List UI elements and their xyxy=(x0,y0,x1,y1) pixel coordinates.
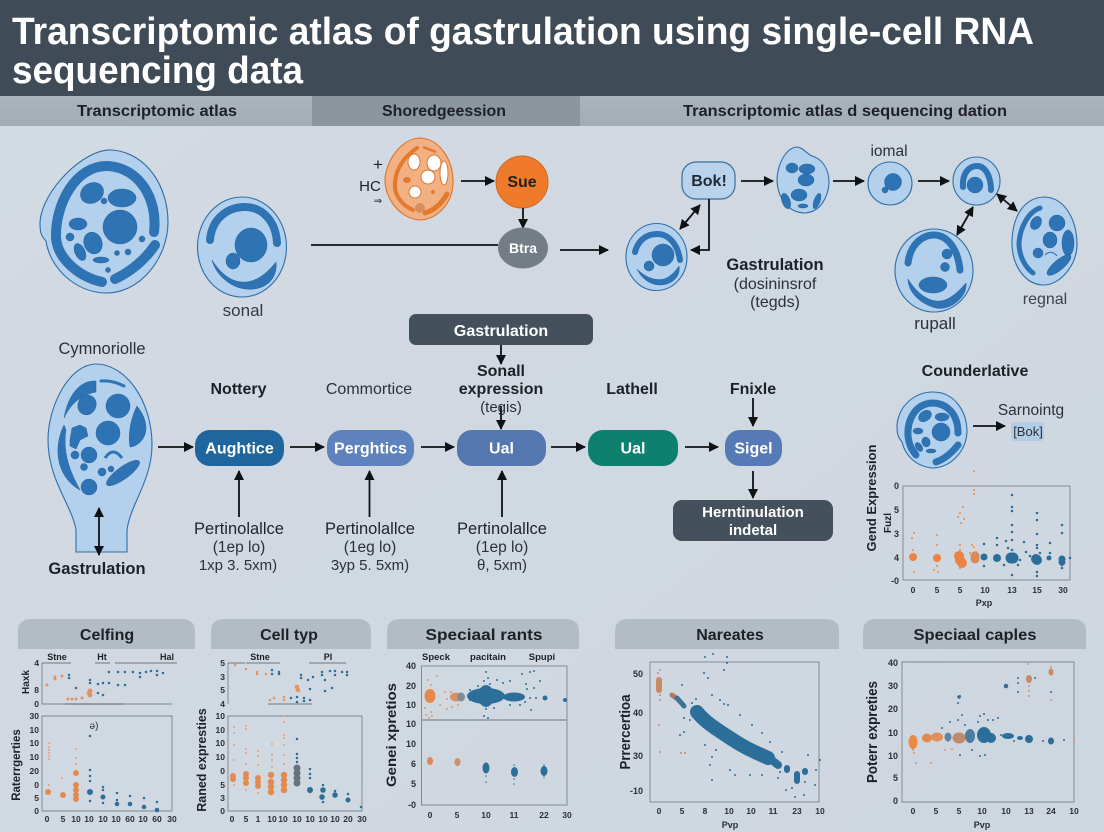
x axis labels: 5 xyxy=(958,585,963,595)
title banner: sequencing data xyxy=(12,50,304,92)
top chart: 5 xyxy=(220,685,225,695)
top chart: Hal xyxy=(160,652,174,662)
heading: Sonall expression: (tegis) xyxy=(480,399,522,416)
top chart xyxy=(220,652,347,709)
heading: Lathell: Lathell xyxy=(606,381,658,398)
arrow: Bok to cell B xyxy=(741,180,773,182)
heading: Counderlative: Counderlative xyxy=(922,363,1028,380)
bottom chart: 30 xyxy=(30,711,39,721)
heading xyxy=(615,619,839,649)
arrow: Perghtics to Ual xyxy=(421,446,454,448)
heading: Cell typ xyxy=(260,627,318,644)
text: Gastrulation caption xyxy=(726,256,824,311)
bottom chart: 10 xyxy=(216,752,225,762)
chart: 0 xyxy=(428,810,433,820)
bottom chart: 10 xyxy=(278,814,288,824)
arrow: Aughtice to Perghtics xyxy=(290,446,324,448)
y axis labels: 3 xyxy=(894,529,899,539)
arrow: Ual to Ual xyxy=(551,446,585,448)
text: Gastrulation caption: (dosininsrof xyxy=(734,276,817,293)
y axis labels: -0 xyxy=(891,576,899,586)
icon: Counderlative cell xyxy=(897,392,967,468)
chart: 0 xyxy=(911,806,916,816)
bottom chart: 5 xyxy=(34,793,39,803)
chart: 10 xyxy=(1001,806,1011,816)
chart: 10 xyxy=(1069,806,1079,816)
chart: -10 xyxy=(630,786,643,796)
top chart: Haxk xyxy=(21,670,32,694)
arrow: up to Perghtics xyxy=(368,471,370,517)
label: Cymnoriolle: Cymnoriolle xyxy=(58,340,146,358)
top chart: 5 xyxy=(220,658,225,668)
y axis labels: 5 xyxy=(894,505,899,515)
bottom chart: Raned expresties xyxy=(195,708,209,812)
arrow: cell D double to regnal xyxy=(997,194,1017,211)
icon: regnal cell xyxy=(1012,197,1077,285)
box: Herntinulation indetal: Herntinulation xyxy=(702,504,804,521)
box: Herntinulation indetal: indetal xyxy=(729,522,777,539)
y axis labels: 0 xyxy=(894,481,899,491)
chart: 5 xyxy=(893,773,898,783)
node: Ual green: Ual xyxy=(621,440,645,458)
node: Aughtice xyxy=(195,430,284,466)
arrow: Ual to Sigel xyxy=(685,446,718,448)
label: sonal: sonal xyxy=(223,301,263,320)
arrow: Bok double to cell A xyxy=(680,205,700,229)
node: Bok xyxy=(682,162,735,199)
chart: 5 xyxy=(680,806,685,816)
bottom chart: 0 xyxy=(34,806,39,816)
node: Ual blue xyxy=(457,430,546,466)
text: Pertinolallce 1: (1ep lo) xyxy=(213,539,265,556)
panel: Speciaal rants xyxy=(383,619,579,820)
chart: 50 xyxy=(633,669,643,679)
text: Pertinolallce 3: θ, 5xm) xyxy=(477,557,527,574)
chart: 30 xyxy=(633,751,643,761)
chart: 6 xyxy=(411,759,416,769)
node: Sue: Sue xyxy=(507,174,537,191)
icon: flask cell xyxy=(48,364,152,552)
bottom chart: 10 xyxy=(216,738,225,748)
bottom chart: 0 xyxy=(34,780,39,790)
chart: Poterr expreties xyxy=(864,681,881,783)
heading: Celfing xyxy=(80,627,134,644)
bottom chart: 10 xyxy=(30,752,39,762)
title banner xyxy=(0,0,1104,96)
section tab bar: Shoredgeession xyxy=(382,103,506,120)
top chart: Ht xyxy=(97,652,107,662)
panel: Speciaal rants: Spupi xyxy=(529,652,555,663)
heading: Nottery: Nottery xyxy=(210,381,267,398)
arrow: Sue to Btra xyxy=(522,208,524,228)
bottom chart: 0 xyxy=(220,766,225,776)
panel: Speciaal rants: pacitain xyxy=(470,652,506,663)
bottom chart: 5 xyxy=(220,780,225,790)
panel: Nareates xyxy=(615,619,839,830)
y axis labels xyxy=(891,481,899,586)
chart: 5 xyxy=(957,806,962,816)
heading: Nareates xyxy=(696,627,764,644)
section tab bar xyxy=(0,96,1104,126)
bottom chart: 5 xyxy=(244,814,249,824)
bottom chart: 1 xyxy=(256,814,261,824)
arrow: Sonall to Ual xyxy=(500,406,502,429)
bottom chart: 10 xyxy=(292,814,302,824)
x axis labels: 10 xyxy=(980,585,990,595)
chart: 23 xyxy=(792,806,802,816)
bottom chart: 10 xyxy=(305,814,315,824)
orange points xyxy=(912,471,976,572)
top chart: Stne xyxy=(250,652,270,662)
heading: Speciaal caples xyxy=(914,627,1037,644)
bottom chart: 10 xyxy=(330,814,340,824)
icon: cell D xyxy=(953,157,1000,205)
bottom chart: Raterrgerties xyxy=(11,729,23,801)
bottom chart xyxy=(195,708,367,824)
chart: 10 xyxy=(746,806,756,816)
callout: Sarnointg Bok: [Bok] xyxy=(1013,424,1043,439)
top chart: 4 xyxy=(34,658,39,668)
bottom chart: 20 xyxy=(30,766,39,776)
arrow: up to Aughtice xyxy=(238,471,240,517)
arrow: Fnixle to Sigel xyxy=(752,398,754,426)
chart: 10 xyxy=(406,700,416,710)
chart: -0 xyxy=(408,800,416,810)
heading: Commortice: Commortice xyxy=(326,381,412,398)
bottom chart: 3 xyxy=(220,793,225,803)
text: Pertinolallce 2: 3yp 5. 5xm) xyxy=(331,557,409,574)
top chart: 4 xyxy=(220,699,225,709)
label: HC: HC xyxy=(359,178,381,195)
icon: large cell xyxy=(40,150,168,293)
arrow: Sigel to Herntinulation xyxy=(752,471,754,498)
label: iomal: iomal xyxy=(870,143,908,160)
callout: Sarnointg Bok: Sarnointg xyxy=(998,402,1064,419)
label: Gastrulation under flask: Gastrulation xyxy=(48,560,146,578)
chart: 10 xyxy=(406,719,416,729)
bottom chart: 10 xyxy=(98,814,108,824)
text: Pertinolallce 1 xyxy=(194,520,284,574)
chart: 0 xyxy=(893,796,898,806)
chart: gene expression strip plot: Pxp xyxy=(976,598,993,608)
panel: Speciaal caples xyxy=(863,619,1086,830)
chart: 20 xyxy=(406,681,416,691)
chart xyxy=(864,658,1079,830)
heading: Sonall expression xyxy=(459,363,543,416)
bottom chart: 60 xyxy=(152,814,162,824)
bottom chart: 10 xyxy=(267,814,277,824)
bottom chart: 30 xyxy=(167,814,177,824)
node: Btra: Btra xyxy=(509,240,537,256)
title banner: Transcriptomic atlas of gastrulation using single-cell RNA xyxy=(12,11,1034,53)
text: Pertinolallce 2: (1eg lo) xyxy=(344,539,396,556)
arrow: Btra to cell xyxy=(560,249,608,251)
y axis labels: 4 xyxy=(894,553,899,563)
chart: 22 xyxy=(539,810,549,820)
icon: orange cell xyxy=(385,138,453,220)
box: Gastrulation xyxy=(409,314,593,345)
arrow: line into Btra xyxy=(311,244,498,246)
node: Sigel xyxy=(725,430,782,466)
x axis labels xyxy=(911,585,1068,595)
heading: Speciaal rants xyxy=(426,627,543,644)
bottom chart: 10 xyxy=(138,814,148,824)
text: Pertinolallce 3 xyxy=(457,520,547,574)
chart xyxy=(617,654,825,830)
top chart: PI xyxy=(324,652,332,662)
node: Perghtics xyxy=(327,430,414,466)
chart: Pvp xyxy=(722,820,739,830)
bottom chart: 60 xyxy=(125,814,135,824)
chart: 20 xyxy=(888,704,898,714)
chart: 5 xyxy=(411,779,416,789)
chart: 30 xyxy=(888,681,898,691)
heading: Sonall expression: Sonall xyxy=(477,363,525,380)
chart: 40 xyxy=(888,658,898,668)
text: Pertinolallce 1: 1xp 3. 5xm) xyxy=(199,557,277,574)
label: HC xyxy=(359,155,383,207)
arrow: vertical double in flask neck xyxy=(98,508,100,555)
bottom chart: 10 xyxy=(216,711,225,721)
text: Pertinolallce 3: (1ep lo) xyxy=(476,539,528,556)
chart: 0 xyxy=(657,806,662,816)
chart xyxy=(383,661,572,820)
panel: Cell typ xyxy=(195,619,371,824)
bottom chart: 0 xyxy=(230,814,235,824)
icon: cell A xyxy=(626,224,687,290)
top chart: 0 xyxy=(34,699,39,709)
text: Pertinolallce 2 xyxy=(325,520,415,574)
axis titles: Gend Expression xyxy=(864,444,879,551)
bottom chart: 10 xyxy=(216,725,225,735)
node: Sue xyxy=(496,156,548,208)
text: Pertinolallce 3: Pertinolallce xyxy=(457,520,547,538)
chart: 30 xyxy=(562,810,572,820)
x axis labels: 0 xyxy=(911,585,916,595)
label: rupall: rupall xyxy=(914,314,956,333)
box: Herntinulation indetal xyxy=(673,500,833,541)
icon: cell C xyxy=(868,162,912,205)
arrow: cell B to cell C xyxy=(833,180,864,182)
panel: Speciaal rants: Speck xyxy=(422,652,451,663)
bottom chart: 30 xyxy=(357,814,367,824)
node: Perghtics: Perghtics xyxy=(334,440,407,458)
bottom chart: 0 xyxy=(220,806,225,816)
chart: 10 xyxy=(481,810,491,820)
bottom chart: 10 xyxy=(84,814,94,824)
chart: 10 xyxy=(724,806,734,816)
blue points xyxy=(984,495,1070,576)
arrow: cell C to cell D xyxy=(918,180,949,182)
chart: 10 xyxy=(406,739,416,749)
node: Btra xyxy=(498,228,548,268)
heading: Sonall expression: expression xyxy=(459,381,543,398)
arrow: cell D double to rupall xyxy=(957,207,973,235)
chart: 10 xyxy=(888,728,898,738)
node: Bok: Bok! xyxy=(691,173,727,190)
bottom chart: 20 xyxy=(343,814,353,824)
heading xyxy=(211,619,371,649)
top chart: 3 xyxy=(220,672,225,682)
top chart: Stne xyxy=(47,652,67,662)
bottom chart: 10 xyxy=(30,725,39,735)
bottom chart: 10 xyxy=(30,738,39,748)
heading xyxy=(863,619,1086,649)
box: Gastrulation: Gastrulation xyxy=(454,323,548,340)
chart: 5 xyxy=(455,810,460,820)
node: Sigel: Sigel xyxy=(734,440,773,458)
top chart: 8 xyxy=(34,685,39,695)
bottom chart: 10 xyxy=(318,814,328,824)
chart: 11 xyxy=(768,806,778,816)
chart: gene expression strip plot: Fuzl xyxy=(883,513,894,533)
x axis labels: 15 xyxy=(1032,585,1042,595)
arrow: orange cell to Sue xyxy=(461,180,494,182)
chart: Pvp xyxy=(974,820,991,830)
icon: sonal cell xyxy=(198,197,286,297)
top chart xyxy=(21,652,177,709)
label: HC: + xyxy=(373,155,383,174)
label: regnal: regnal xyxy=(1023,291,1067,308)
node: Aughtice: Aughtice xyxy=(205,440,274,458)
bottom chart: 10 xyxy=(111,814,121,824)
text: Gastrulation caption: (tegds) xyxy=(750,294,800,311)
panel: Celfing xyxy=(11,619,195,824)
heading: Fnixle: Fnixle xyxy=(730,381,776,398)
chart: 10 xyxy=(977,806,987,816)
node: Ual blue: Ual xyxy=(489,440,514,458)
bottom chart: 5 xyxy=(61,814,66,824)
text: Pertinolallce 1: Pertinolallce xyxy=(194,520,284,538)
arrow: flask to Aughtice xyxy=(158,446,193,448)
arrow: Bok down to cell A xyxy=(691,199,709,250)
chart: 10 xyxy=(888,751,898,761)
bottom chart xyxy=(11,711,177,824)
arrow: Gastrulation box down xyxy=(500,345,502,364)
chart: 10 xyxy=(815,806,825,816)
section tab bar: Transcriptomic atlas d sequencing dation xyxy=(683,103,1007,120)
chart: Genei xpretios xyxy=(383,683,399,787)
bottom chart: 0 xyxy=(45,814,50,824)
bottom chart: ə) xyxy=(90,721,98,732)
heading xyxy=(387,619,579,649)
x axis labels: 5 xyxy=(935,585,940,595)
label: HC: ⇒ xyxy=(374,196,382,207)
x axis labels: 13 xyxy=(1007,585,1017,595)
x axis labels: 30 xyxy=(1058,585,1068,595)
arrow: up to Ual xyxy=(501,471,503,517)
callout: Sarnointg Bok xyxy=(998,402,1064,441)
bottom chart: 10 xyxy=(71,814,81,824)
chart: 5 xyxy=(934,806,939,816)
chart: 40 xyxy=(406,661,416,671)
chart: gene expression strip plot xyxy=(864,444,1070,608)
chart: 8 xyxy=(703,806,708,816)
chart: 11 xyxy=(510,810,519,820)
node: Ual green xyxy=(588,430,678,466)
text: Pertinolallce 2: Pertinolallce xyxy=(325,520,415,538)
section tab bar: Transcriptomic atlas xyxy=(77,103,237,120)
text: Gastrulation caption: Gastrulation xyxy=(726,256,824,274)
icon: rupall cell xyxy=(895,229,973,312)
icon: cell B xyxy=(777,147,829,213)
chart: 24 xyxy=(1046,806,1056,816)
chart: 13 xyxy=(1024,806,1034,816)
chart: Prrercertioa xyxy=(617,694,634,770)
arrow: to Sarnointg xyxy=(973,425,1005,427)
heading xyxy=(18,619,195,649)
chart: 40 xyxy=(633,708,643,718)
